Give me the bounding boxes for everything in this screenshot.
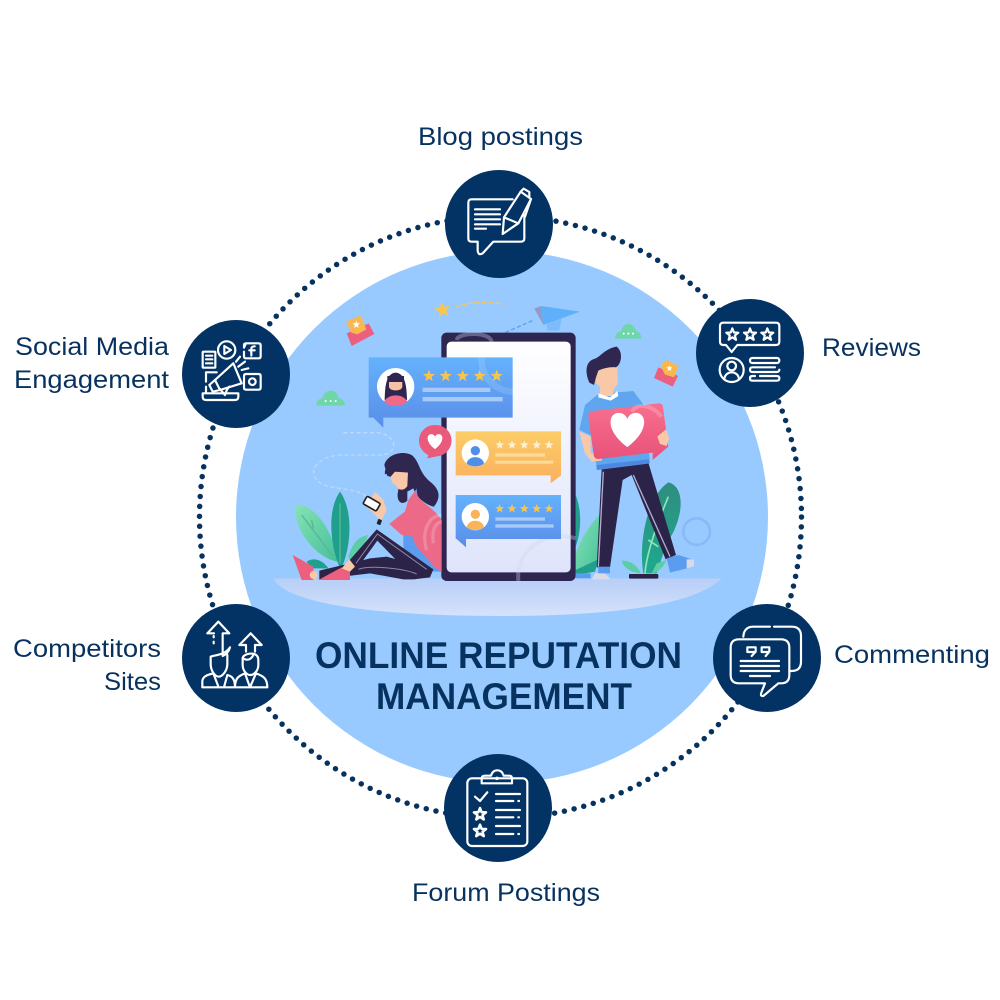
node: blog postings [418,123,583,278]
right envelope [654,360,679,387]
icon: people with arrows [202,622,267,687]
collar [598,391,618,401]
decorative ring [683,518,710,545]
node: competitors sites [13,604,290,712]
label: Reviews [822,334,921,362]
arm [579,432,603,462]
heart sign [588,403,668,460]
hair back [384,453,439,507]
legs [319,557,433,579]
label: Commenting [834,641,990,669]
node: reviews [696,299,921,407]
right cloud [615,324,641,339]
icon: speech bubbles [731,627,801,696]
paper plane [503,306,580,333]
jacket [389,490,442,572]
hand and phone [367,492,387,520]
left cloud [316,391,345,406]
review card 1 [369,357,513,428]
title: online reputation management [315,635,682,717]
label: Blog postings [418,123,583,151]
node: forum postings [412,754,600,907]
central light blue circle [236,251,768,783]
label: Competitors [13,635,161,663]
label [14,333,169,394]
plants behind man [576,482,681,579]
pants [597,463,676,567]
review card 2 [456,431,561,483]
left envelope [346,315,374,346]
label: Social Media [15,333,169,361]
woman [293,453,442,580]
label [13,635,161,696]
central illustration [273,300,722,616]
left plants [295,492,368,570]
heart bubble [419,425,452,458]
face [391,472,408,490]
icon: clipboard [467,770,527,846]
dashed trail [314,433,394,497]
label: Engagement [14,366,169,394]
avatar woman [377,368,414,406]
label: Forum Postings [412,879,600,907]
shoes [293,555,313,580]
node: social media engagement [14,320,290,428]
man [576,347,694,579]
shoes [667,555,694,573]
review card 3 [456,495,561,547]
title: online reputation management: MANAGEMENT [376,676,632,717]
shirt [403,488,442,572]
icon: chat bubble with pen [468,189,531,254]
star [433,300,452,318]
phone [441,333,576,581]
icon: megaphone and social [203,341,261,400]
head [595,364,618,396]
shirt [579,391,650,470]
label: Sites [104,668,161,696]
icon: stars and user [720,323,779,382]
right hand [657,429,669,446]
node: commenting [713,604,990,712]
title: online reputation management: ONLINE REPUTATION [315,635,682,676]
dotted ring [200,216,802,818]
star trail [456,302,503,307]
ground [273,578,722,616]
